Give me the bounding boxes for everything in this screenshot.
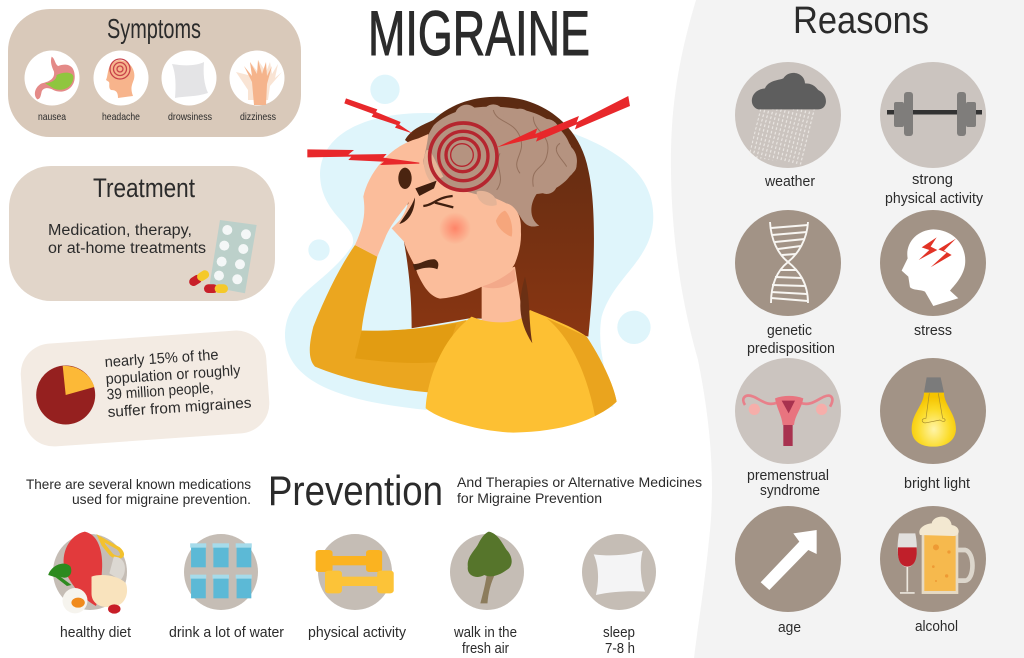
background blob — [285, 113, 653, 410]
title: MIGRAINE — [368, 0, 590, 69]
reason: stress: stress — [914, 323, 952, 339]
symptom: drowsiness: drowsiness — [168, 111, 212, 123]
heading: symptoms: Symptoms — [107, 13, 201, 44]
prevention: sleep — [582, 534, 656, 657]
symptom: headache — [94, 50, 148, 123]
prevention: water — [169, 534, 284, 641]
reason: genetic predisposition: predisposition — [747, 341, 835, 357]
prevention: fresh air: fresh air — [462, 640, 509, 657]
text: alternative therapies — [457, 474, 702, 506]
prevention: physical activity — [308, 534, 406, 641]
symptom: nausea — [24, 50, 80, 123]
reason: weather: weather — [764, 174, 815, 190]
prevention: healthy diet — [48, 532, 132, 641]
reason: premenstrual syndrome — [735, 358, 841, 499]
text: alternative therapies: for Migraine Prevention — [457, 490, 602, 506]
statistic text — [104, 346, 252, 421]
sweater shade — [547, 318, 617, 416]
arm shadow — [355, 323, 457, 363]
symptom: nausea: nausea — [38, 111, 66, 123]
bubble circles — [308, 75, 651, 344]
hand — [355, 134, 428, 257]
statistic text: nearly 15% of the — [104, 346, 219, 371]
symptom: dizziness: dizziness — [240, 111, 276, 123]
reason: age — [735, 506, 841, 636]
treatment text: Medication, therapy, — [48, 222, 192, 239]
hair — [404, 97, 594, 337]
reason: alcohol — [880, 506, 986, 635]
icon: pills — [188, 220, 257, 293]
neck — [482, 267, 523, 323]
hair and eye details — [398, 168, 453, 271]
reason: weather — [735, 62, 841, 190]
target rings — [430, 123, 497, 190]
statistic text: 39 million people, — [106, 379, 214, 403]
lightning bolts — [307, 96, 630, 165]
prevention: water: drink a lot of water — [169, 624, 284, 641]
sweater — [426, 310, 617, 433]
illustration: woman with migraine — [285, 75, 653, 433]
panel: prevalence statistic — [19, 329, 271, 448]
brain — [423, 104, 577, 227]
reason: genetic predisposition: genetic — [767, 323, 812, 339]
jaw shadow — [482, 268, 516, 288]
treatment text: or at-home treatments — [48, 240, 206, 257]
prevention: fresh air — [450, 532, 524, 657]
text: known medications — [26, 476, 251, 507]
reason: strong physical activity: physical activity — [885, 191, 984, 207]
panel: symptoms — [8, 9, 301, 137]
reason: strong physical activity — [880, 62, 986, 207]
statistic text: suffer from migraines — [107, 394, 252, 421]
text: known medications: There are several known medications — [26, 476, 251, 492]
text: alternative therapies: And Therapies or Alternative Medicines — [457, 474, 702, 490]
reason: alcohol: alcohol — [915, 619, 958, 635]
hair strand — [520, 277, 532, 343]
pie chart — [36, 366, 95, 424]
prevention: healthy diet: healthy diet — [60, 624, 132, 641]
statistic text: population or roughly — [105, 362, 241, 388]
prevention: sleep: 7-8 h — [605, 640, 635, 657]
text: known medications: used for migraine prevention. — [72, 491, 251, 507]
reason: stress — [880, 210, 986, 339]
prevention: physical activity: physical activity — [308, 624, 406, 641]
prevention: sleep: sleep — [603, 624, 635, 641]
face — [392, 148, 521, 299]
symptom: headache: headache — [102, 111, 140, 123]
heading: prevention: Prevention — [268, 467, 443, 514]
raised arm — [310, 245, 467, 393]
reason: age: age — [778, 620, 801, 636]
heading: treatment: Treatment — [93, 173, 195, 203]
reason: bright light — [880, 358, 986, 492]
treatment text — [48, 222, 206, 257]
reason: genetic predisposition — [735, 210, 841, 357]
panel: treatment — [9, 166, 275, 301]
panel: right background — [671, 0, 1024, 658]
blush cheek — [439, 212, 471, 244]
reason: bright light: bright light — [904, 476, 970, 492]
reason: premenstrual syndrome: premenstrual — [747, 468, 829, 484]
symptom: drowsiness — [162, 50, 216, 123]
heading: reasons: Reasons — [793, 0, 929, 42]
reason: strong physical activity: strong — [912, 172, 953, 188]
ear — [497, 203, 521, 241]
symptom: dizziness — [230, 50, 284, 123]
prevention: fresh air: walk in the — [453, 624, 517, 641]
reason: premenstrual syndrome: syndrome — [760, 483, 820, 499]
